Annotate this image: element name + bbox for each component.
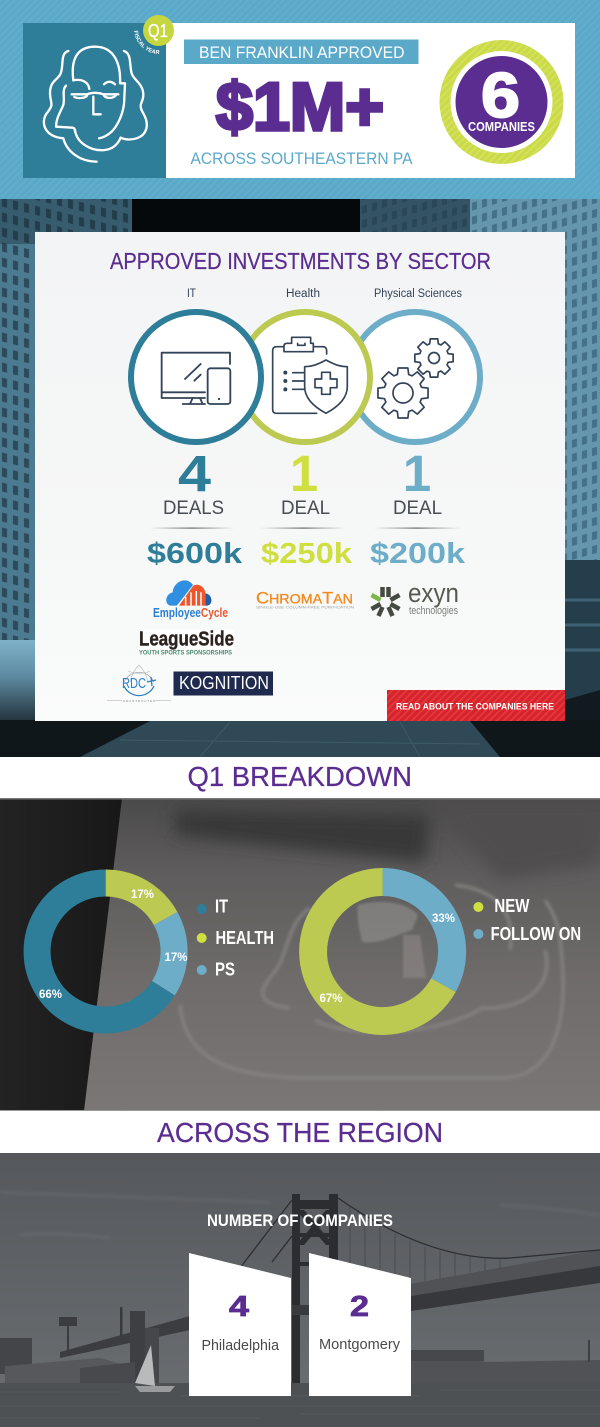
legend: sector: [197, 897, 274, 980]
logo: RDC: SMARTROUTES: [123, 699, 155, 703]
deal amounts: $200k: [370, 538, 466, 570]
card: Philadelphia: 4: [229, 1291, 249, 1323]
deal amounts: [147, 538, 466, 570]
donut chart: new vs follow on: 67%: [319, 993, 343, 1005]
deal counts: [178, 445, 431, 502]
6 companies badge: [440, 40, 564, 164]
donut chart: share by sector: 66%: [39, 989, 62, 1001]
donut chart: share by sector: [37, 883, 188, 1020]
logo: LeagueSide: YOUTH SPORTS SPONSORSHIPS: [139, 651, 232, 657]
right shoreline: [411, 1350, 600, 1383]
deal labels: DEAL: [393, 498, 442, 519]
logo: LeagueSide: LeagueSide: [139, 629, 234, 651]
donut chart: share by sector: 17%: [131, 889, 154, 901]
legend: deal type: [473, 896, 581, 944]
6 companies badge: COMPANIES: [468, 119, 535, 134]
logo: RDC: [107, 665, 171, 703]
Q1 badge: Q1: [148, 21, 168, 41]
logo: ChromaTan: CHROMATAN: [256, 588, 353, 607]
circle: IT devices icon: [131, 312, 261, 442]
donut chart: new vs follow on: [313, 882, 455, 1021]
header card: [23, 23, 575, 178]
section: Q1 breakdown heading: [0, 757, 600, 798]
legend: sector: IT: [215, 897, 228, 917]
legend: sector: HEALTH: [216, 928, 274, 948]
logo: Exyn Technologies: [372, 578, 459, 617]
deal amounts: $600k: [147, 538, 243, 570]
button: read about the companies: [387, 690, 565, 721]
donut chart: new vs follow on: 33%: [432, 913, 455, 925]
left span and shoreline: [60, 1316, 190, 1358]
deal counts: 1: [403, 445, 431, 502]
subheading: ACROSS SOUTHEASTERN PA: [190, 149, 413, 168]
deal amounts: $250k: [261, 538, 353, 570]
icon: Ben Franklin portrait: [23, 23, 166, 178]
section: across the region heading: ACROSS THE REGION: [157, 1117, 443, 1148]
right span: [411, 1250, 600, 1311]
6 companies badge: 6: [481, 61, 520, 131]
circle: physical sciences gears icon: [350, 312, 480, 442]
city street photo background: [0, 199, 600, 757]
section: Q1 breakdown heading: Q1 BREAKDOWN: [188, 761, 412, 792]
card: Montgomery: [309, 1253, 411, 1396]
logo: Exyn Technologies: technologies: [409, 605, 458, 617]
banner: Ben Franklin approved: BEN FRANKLIN APPROVED: [199, 43, 404, 62]
logo: LeagueSide: [139, 629, 234, 657]
card: Montgomery: Montgomery: [319, 1336, 400, 1353]
logo: EmployeeCycle: [153, 580, 228, 620]
Q1 badge: FISCAL YEAR: [134, 30, 160, 54]
sector labels: Health: [286, 288, 320, 300]
sector labels: Physical Sciences: [374, 288, 462, 300]
card: Montgomery: 2: [350, 1291, 369, 1323]
logo: Exyn Technologies: exyn: [408, 578, 459, 608]
legend: sector: PS: [215, 960, 235, 980]
sector labels: IT: [187, 288, 196, 300]
panel: approved investments by sector: [35, 232, 565, 721]
tower: [292, 1194, 338, 1386]
Q1 badge: [134, 15, 174, 54]
bridge photo background: [0, 1153, 600, 1427]
sailboat: [135, 1345, 175, 1392]
button: read about the companies: READ ABOUT THE COMPANIES HERE: [396, 702, 554, 712]
logo: RDC: RDC: [122, 675, 146, 692]
deal labels: [163, 498, 442, 519]
sector labels: [187, 288, 462, 300]
card: Philadelphia: [189, 1253, 291, 1396]
legend: deal type: NEW: [494, 896, 529, 916]
headline amount: $1M+: [216, 69, 384, 145]
section: across the region heading: [0, 1111, 600, 1153]
blurred grey photo background: [0, 798, 600, 1111]
card: Philadelphia: Philadelphia: [202, 1337, 280, 1354]
donut chart: share by sector: 17%: [164, 952, 188, 964]
logo: ChromaTan: SINGLE-USE COLUMN-FREE PURIFICATION: [256, 604, 354, 610]
circle: health clipboard icon: [240, 312, 370, 442]
header band: [0, 0, 600, 199]
legend: deal type: FOLLOW ON: [491, 924, 581, 944]
deal counts: 1: [290, 445, 318, 502]
logo: EmployeeCycle: EmployeeCycle: [153, 606, 228, 620]
logo: Kognition: KOGNITION: [179, 673, 269, 693]
heading: approved investments: APPROVED INVESTMENTS BY SECTOR: [110, 248, 491, 274]
deal counts: 4: [178, 445, 212, 502]
heading: number of companies: NUMBER OF COMPANIES: [207, 1212, 393, 1230]
deal labels: DEAL: [281, 498, 330, 519]
deal labels: DEALS: [163, 498, 224, 519]
